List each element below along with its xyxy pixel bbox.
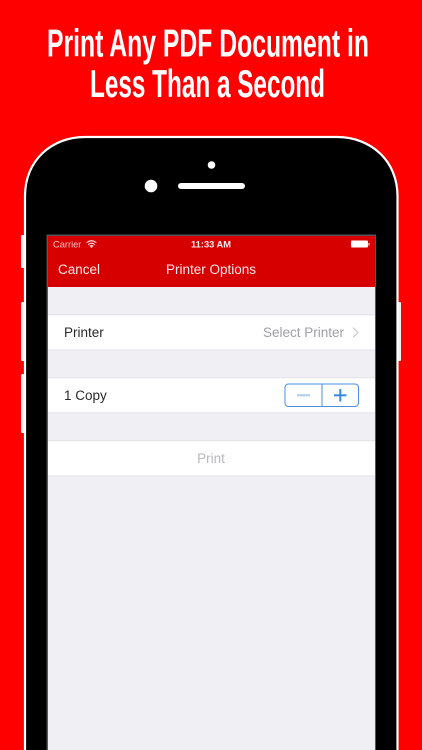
icon: battery bbox=[351, 240, 370, 248]
phone side buttons bbox=[21, 235, 401, 433]
phone speaker bbox=[178, 183, 245, 189]
title bbox=[47, 22, 369, 106]
icon: chevron bbox=[353, 328, 358, 338]
row: printer bbox=[48, 314, 375, 350]
phone camera dot bbox=[208, 161, 215, 169]
status: time: 11:33 AM bbox=[191, 240, 231, 250]
cancel button: Cancel bbox=[58, 262, 100, 277]
printer label: Printer bbox=[64, 325, 104, 340]
navigation bar bbox=[48, 236, 375, 287]
icon: wifi bbox=[87, 241, 96, 247]
row: print button bbox=[48, 440, 375, 476]
copy label: 1 Copy bbox=[64, 388, 107, 403]
phone front sensor bbox=[145, 180, 157, 192]
stepper control bbox=[285, 384, 358, 406]
nav title: Printer Options bbox=[166, 262, 256, 277]
status: carrier: Carrier bbox=[53, 240, 81, 250]
print label: Print bbox=[197, 451, 225, 466]
app screen bbox=[46, 234, 376, 750]
select printer value: Select Printer bbox=[263, 325, 345, 340]
phone body bbox=[25, 137, 398, 750]
row: copies bbox=[48, 378, 375, 413]
